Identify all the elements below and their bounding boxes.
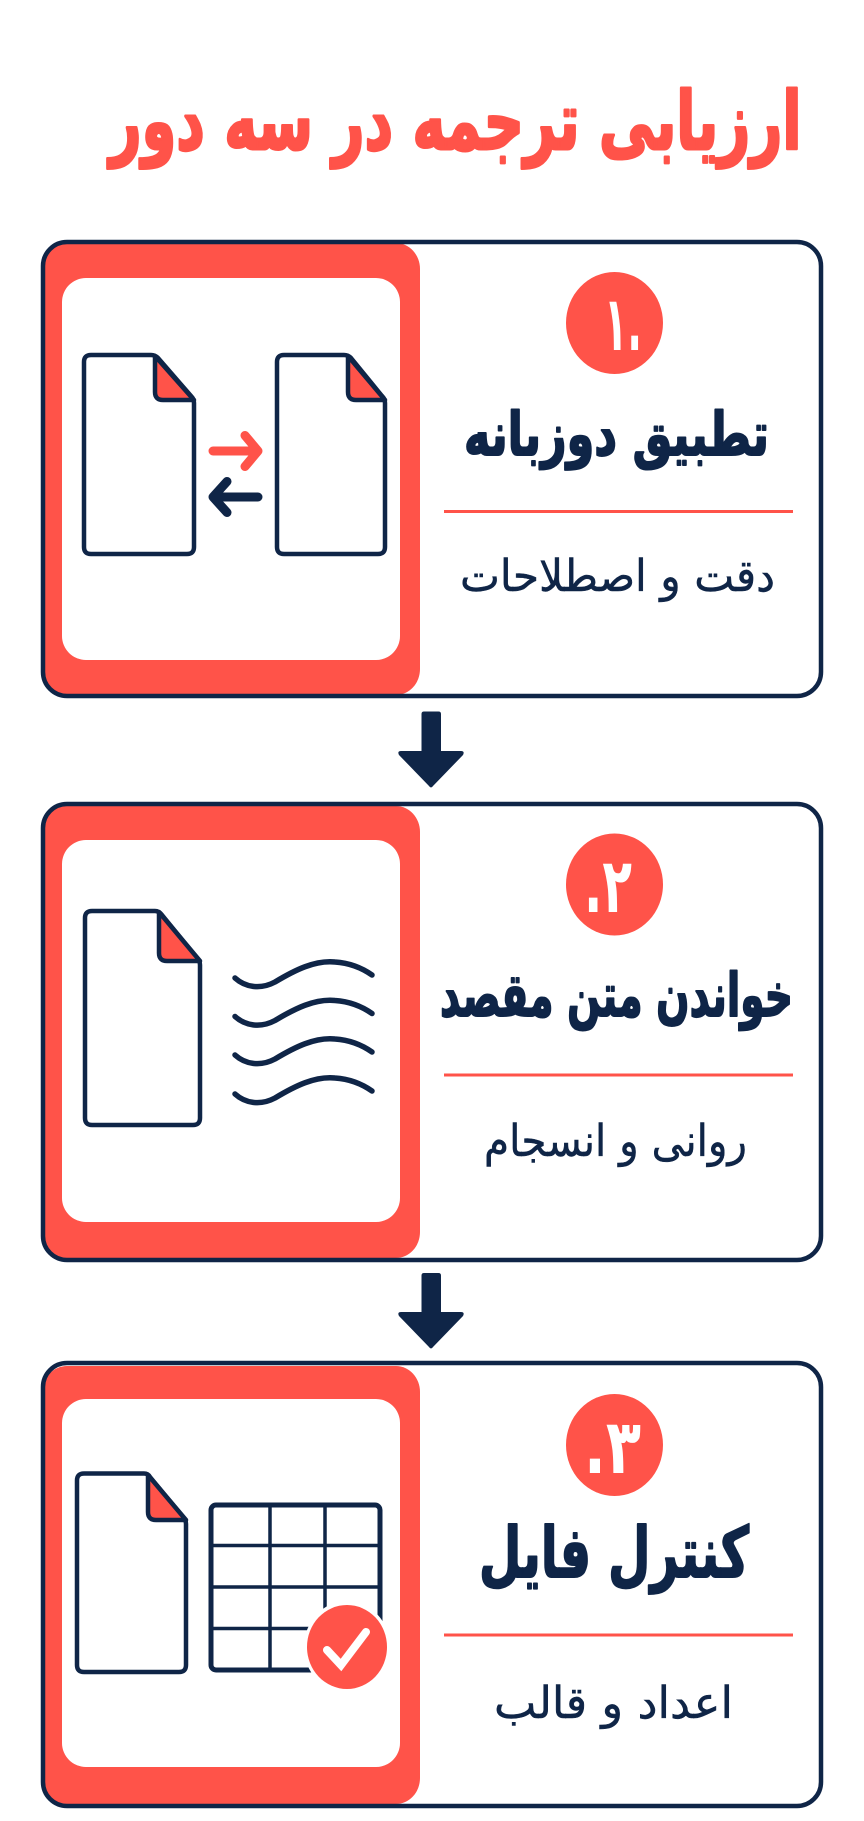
red image panel	[43, 1366, 420, 1804]
arrow: forward	[213, 436, 258, 466]
red image panel	[43, 243, 420, 695]
step number: ۱.	[604, 279, 642, 368]
white image area	[62, 1399, 400, 1767]
step number: .۲	[584, 841, 632, 930]
red image panel	[43, 806, 420, 1258]
step number: .۳	[584, 1402, 641, 1491]
arrow: backward	[213, 482, 258, 512]
card background	[43, 804, 821, 1260]
card border	[43, 804, 821, 1260]
icon: check badge	[304, 1601, 390, 1693]
white image area	[62, 278, 400, 660]
subtitle: اعداد و قالب	[494, 1678, 733, 1729]
arrow: step 1 to 2	[398, 712, 464, 788]
card border	[43, 242, 821, 696]
card background	[43, 242, 821, 696]
panel: step 1	[43, 242, 821, 696]
subtitle: دقت و اصطلاحات	[460, 551, 775, 602]
subtitle: روانی و انسجام	[484, 1116, 747, 1167]
icon: document	[77, 1474, 186, 1672]
divider	[444, 510, 793, 513]
icon: source document	[84, 355, 194, 554]
heading: کنترل فایل	[479, 1512, 749, 1594]
divider	[444, 1634, 793, 1636]
card background	[43, 1363, 821, 1806]
icon: flowing text lines	[235, 962, 372, 1103]
heading: تطبیق دوزبانه	[464, 400, 769, 470]
step number	[566, 272, 663, 374]
step number	[566, 1394, 663, 1496]
icon: document	[85, 911, 200, 1125]
card border	[43, 1363, 821, 1806]
icon: target document	[277, 355, 385, 554]
step number	[566, 834, 663, 936]
icon: table	[211, 1505, 380, 1670]
divider	[444, 1074, 793, 1076]
white image area	[62, 840, 400, 1222]
arrow: step 2 to 3	[398, 1273, 464, 1348]
panel: step 2	[43, 804, 821, 1260]
panel: step 3	[43, 1363, 821, 1806]
